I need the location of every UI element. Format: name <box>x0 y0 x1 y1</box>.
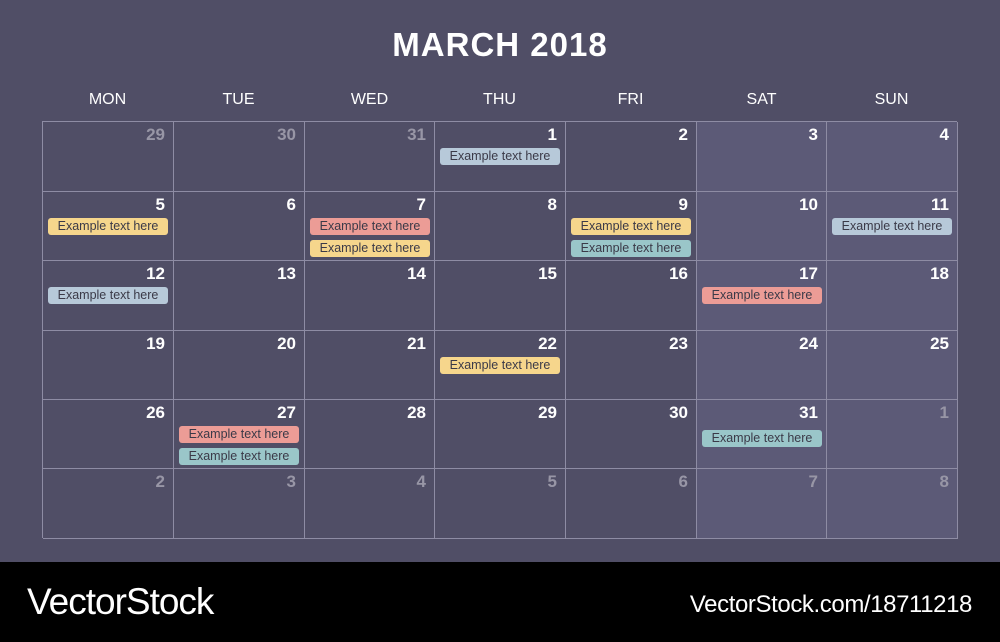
calendar grid: 31 <box>407 125 426 144</box>
calendar grid: 10 <box>799 195 818 214</box>
calendar grid: Example text here <box>712 431 812 445</box>
calendar grid: Example text here <box>320 219 420 233</box>
calendar grid: 6 <box>679 472 688 491</box>
calendar grid: 13 <box>277 264 296 283</box>
calendar grid: Example text here <box>842 219 942 233</box>
calendar grid: 15 <box>538 264 557 283</box>
calendar grid: 1 <box>548 125 557 144</box>
calendar grid: Example text here <box>58 219 158 233</box>
calendar grid: 3 <box>809 125 818 144</box>
calendar grid: 9 <box>679 195 688 214</box>
calendar grid: 6 <box>287 195 296 214</box>
footer <box>0 562 1000 642</box>
calendar grid: 4 <box>417 472 426 491</box>
calendar grid: Example text here <box>581 241 681 255</box>
weekday headers: THU <box>483 91 516 108</box>
calendar grid: 31 <box>799 403 818 422</box>
weekday headers <box>89 91 908 108</box>
calendar grid: 21 <box>407 334 426 353</box>
calendar grid: 26 <box>146 403 165 422</box>
calendar grid: 27 <box>277 403 296 422</box>
calendar grid: 11 <box>931 195 949 214</box>
calendar grid: 17 <box>799 264 818 283</box>
calendar grid: 23 <box>669 334 688 353</box>
calendar grid: 30 <box>669 403 688 422</box>
weekday headers: FRI <box>618 91 643 108</box>
calendar grid: Example text here <box>189 427 289 441</box>
calendar grid: Example text here <box>450 149 550 163</box>
calendar grid: Example text here <box>450 358 550 372</box>
weekday headers: WED <box>351 91 388 108</box>
calendar grid: Example text here <box>712 288 812 302</box>
weekday headers: SUN <box>875 91 908 108</box>
weekday headers: SAT <box>747 91 776 108</box>
calendar grid: Example text here <box>189 449 289 463</box>
calendar grid: 1 <box>940 403 949 422</box>
calendar grid: 28 <box>407 403 426 422</box>
calendar grid: 20 <box>277 334 296 353</box>
calendar grid: 18 <box>930 264 949 283</box>
calendar grid: 25 <box>930 334 949 353</box>
calendar grid: Example text here <box>58 288 158 302</box>
calendar grid: 24 <box>799 334 818 353</box>
calendar grid: 5 <box>548 472 557 491</box>
calendar grid <box>42 121 957 538</box>
calendar grid: 4 <box>940 125 949 144</box>
calendar grid: 14 <box>407 264 426 283</box>
calendar grid: 2 <box>156 472 165 491</box>
weekday headers: TUE <box>222 91 254 108</box>
calendar grid: 7 <box>417 195 426 214</box>
calendar grid: 2 <box>679 125 688 144</box>
calendar grid: Example text here <box>320 241 420 255</box>
calendar grid: 29 <box>538 403 557 422</box>
calendar grid: 19 <box>146 334 165 353</box>
title: MARCH 2018 <box>392 26 608 63</box>
calendar grid: Example text here <box>581 219 681 233</box>
calendar grid: 16 <box>669 264 688 283</box>
weekday headers: MON <box>89 91 126 108</box>
calendar grid: 22 <box>538 334 557 353</box>
calendar grid: 8 <box>940 472 949 491</box>
calendar grid: 12 <box>146 264 165 283</box>
calendar grid: 3 <box>287 472 296 491</box>
calendar grid: 30 <box>277 125 296 144</box>
footer: VectorStock.com/18711218 <box>690 591 972 618</box>
footer: VectorStock <box>27 581 213 622</box>
calendar grid: 8 <box>548 195 557 214</box>
calendar grid: 5 <box>156 195 165 214</box>
calendar grid: 29 <box>146 125 165 144</box>
calendar grid: 7 <box>809 472 818 491</box>
